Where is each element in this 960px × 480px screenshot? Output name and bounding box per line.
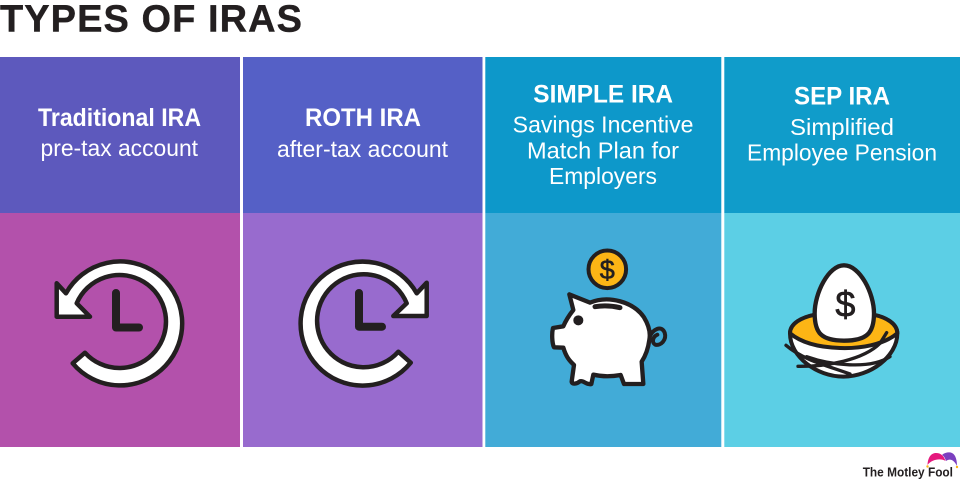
text: Savings Incentive Match Plan for Employers: Savings Incentive bbox=[513, 112, 694, 138]
icon: jester hat bbox=[926, 452, 958, 468]
text: Savings Incentive Match Plan for Employers: Match Plan for bbox=[527, 138, 679, 164]
panel: Traditional IRA bbox=[0, 57, 240, 447]
text: after-tax account: after-tax account bbox=[277, 136, 449, 162]
heading: SEP IRA: SEP IRA bbox=[794, 83, 890, 111]
text: Simplified Employee Pension: Employee Pension bbox=[747, 140, 937, 166]
icon: clockwise clock bbox=[301, 262, 427, 386]
icon: piggy bank bbox=[552, 294, 665, 384]
text: Savings Incentive Match Plan for Employers: Employers bbox=[549, 163, 657, 189]
text: Savings Incentive Match Plan for Employers bbox=[513, 112, 694, 189]
icon: counter-clockwise clock bbox=[57, 261, 182, 385]
text: Simplified Employee Pension: Simplified bbox=[790, 114, 894, 140]
icon: nest egg: $ bbox=[835, 284, 855, 325]
heading: SIMPLE IRA: SIMPLE IRA bbox=[533, 81, 673, 109]
panel: SIMPLE IRA bbox=[485, 57, 721, 447]
text: pre-tax account: pre-tax account bbox=[40, 135, 199, 161]
icon: nest egg bbox=[786, 265, 897, 377]
panel: SEP IRA bbox=[724, 57, 960, 447]
text: Simplified Employee Pension bbox=[747, 114, 937, 166]
logo: The Motley Fool bbox=[863, 452, 958, 480]
heading: Traditional IRA: Traditional IRA bbox=[38, 104, 201, 132]
icon: coin bbox=[588, 250, 626, 288]
heading: ROTH IRA: ROTH IRA bbox=[305, 104, 421, 132]
panel: ROTH IRA bbox=[243, 57, 482, 447]
icon: coin: $ bbox=[600, 255, 615, 285]
logo: The Motley Fool: The Motley Fool bbox=[863, 464, 953, 480]
